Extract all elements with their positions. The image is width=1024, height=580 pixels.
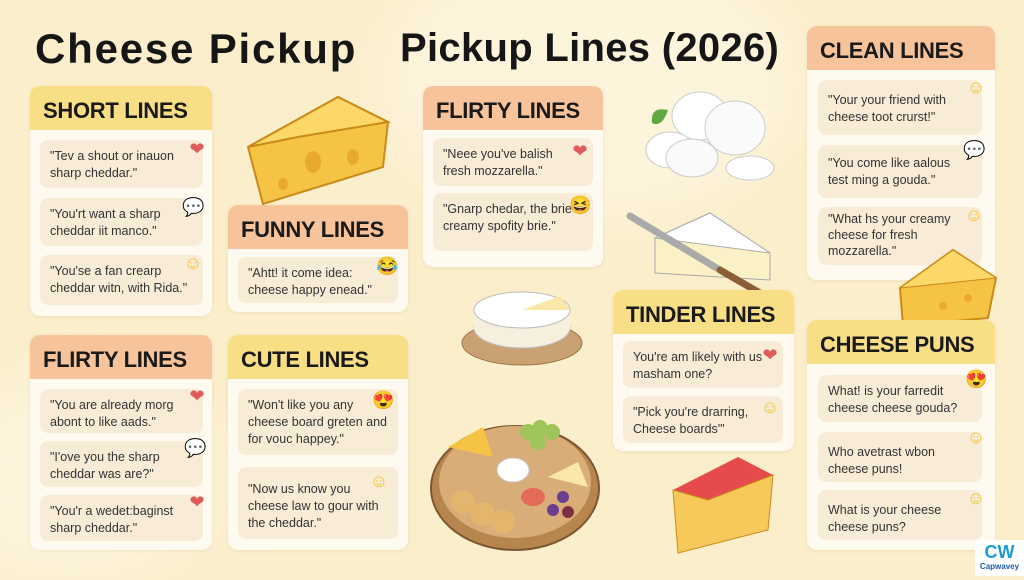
icon: chat: 💬 (182, 197, 204, 217)
icon: cheese wedge (246, 96, 391, 205)
icon: mozzarella (646, 92, 774, 180)
icon: heart: ❤ (762, 345, 778, 365)
item (40, 140, 203, 188)
panel: flirty lines left (30, 335, 212, 550)
icon: chat: 💬 (963, 140, 985, 160)
panel: tinder lines (613, 290, 794, 451)
heading (228, 205, 408, 249)
heading (613, 290, 794, 334)
heading: CHEESE PUNS (820, 332, 974, 357)
item: What is your cheese cheese puns? (828, 503, 941, 534)
item (818, 80, 982, 135)
item: "Tev a shout or inauon sharp cheddar." (50, 149, 174, 180)
logo: CW (984, 542, 1014, 562)
icon: smile: ☺ (184, 253, 202, 273)
item (433, 138, 593, 186)
logo (975, 540, 1024, 576)
item: "Now us know you cheese law to gour with the cheddar." (248, 482, 379, 530)
heading (228, 335, 408, 379)
icon: cheese wedge right (898, 248, 998, 320)
item (238, 389, 398, 455)
panel: cheese puns (807, 320, 995, 550)
item: "You are already morg abont to like aads." (50, 398, 174, 429)
heading (30, 335, 212, 379)
icon: smile: ☺ (761, 397, 779, 417)
item (238, 467, 398, 539)
icon: brie with knife (626, 212, 770, 290)
item: "You'rt want a sharp cheddar iit manco." (50, 207, 161, 238)
item: "Gnarp chedar, the brie creamy spofity brie." (443, 202, 572, 233)
icon: cheese board (430, 420, 600, 551)
icon: smile: ☺ (967, 77, 985, 97)
item (433, 193, 593, 251)
item: "Won't like you any cheese board greten and for vouc happey." (248, 398, 387, 446)
item (238, 257, 398, 303)
panel: clean lines (807, 26, 995, 280)
heading (423, 86, 603, 130)
icon: laugh: 😂 (376, 256, 398, 276)
item (40, 389, 203, 433)
item (818, 490, 982, 540)
item: "You come like aalous test ming a gouda." (828, 156, 950, 187)
title second part: Pickup Lines (2026) (400, 26, 779, 70)
item: What! is your farredit cheese cheese gouda? (828, 384, 957, 415)
item (818, 432, 982, 482)
heading: FUNNY LINES (241, 217, 384, 242)
item (818, 207, 982, 265)
icon: smile: ☺ (965, 205, 983, 225)
item: "What hs your creamy cheese for fresh mozzarella." (828, 212, 951, 258)
icon: chat: 💬 (184, 438, 206, 458)
icon: heart eyes: 😍 (965, 369, 987, 389)
icon: heart: ❤ (572, 141, 588, 161)
icon: heart: ❤ (189, 139, 205, 159)
item (623, 396, 783, 443)
panel: short lines (30, 86, 212, 316)
item (623, 341, 783, 388)
heading (807, 26, 995, 70)
icon: smile: ☺ (967, 488, 985, 508)
heading: TINDER LINES (626, 302, 775, 327)
panel: flirty lines middle (423, 86, 603, 267)
heading: FLIRTY LINES (43, 347, 187, 372)
panel: funny lines (228, 205, 408, 312)
title: Cheese Pickup (35, 25, 357, 72)
icon: smile: ☺ (370, 471, 388, 491)
item: "You'se a fan crearp cheddar witn, with Rida." (50, 264, 187, 295)
item: "Ahtt! it come idea: cheese happy enead." (248, 266, 372, 297)
heading (807, 320, 995, 364)
item (40, 255, 203, 305)
item: "I'ove you the sharp cheddar was are?" (50, 450, 160, 481)
item: Who avetrast wbon cheese puns! (828, 445, 935, 476)
icon: camembert (462, 292, 582, 366)
icon: grin: 😆 (569, 195, 591, 215)
item: "Your your friend with cheese toot crurst!" (828, 93, 946, 124)
icon: red gouda (672, 457, 774, 554)
item (818, 145, 982, 198)
item (40, 495, 203, 541)
icon: heart eyes: 😍 (372, 390, 394, 410)
item (40, 441, 203, 487)
icon: heart: ❤ (189, 492, 205, 512)
item: "Pick you're drarring, Cheese boards'" (633, 405, 748, 436)
heading: SHORT LINES (43, 98, 188, 123)
heading: CLEAN LINES (820, 38, 963, 63)
heading (30, 86, 212, 130)
icon: heart: ❤ (189, 386, 205, 406)
item: "Neee you've balish fresh mozzarella." (443, 147, 553, 178)
item: You're am likely with us masham one? (633, 350, 762, 381)
icon: smile: ☺ (967, 427, 985, 447)
heading: FLIRTY LINES (436, 98, 580, 123)
heading: CUTE LINES (241, 347, 369, 372)
item (40, 198, 203, 246)
panel: cute lines (228, 335, 408, 550)
logo: Capwavey (980, 562, 1019, 571)
item: "You'r a wedet:baginst sharp cheddar." (50, 504, 173, 535)
item (818, 375, 982, 422)
